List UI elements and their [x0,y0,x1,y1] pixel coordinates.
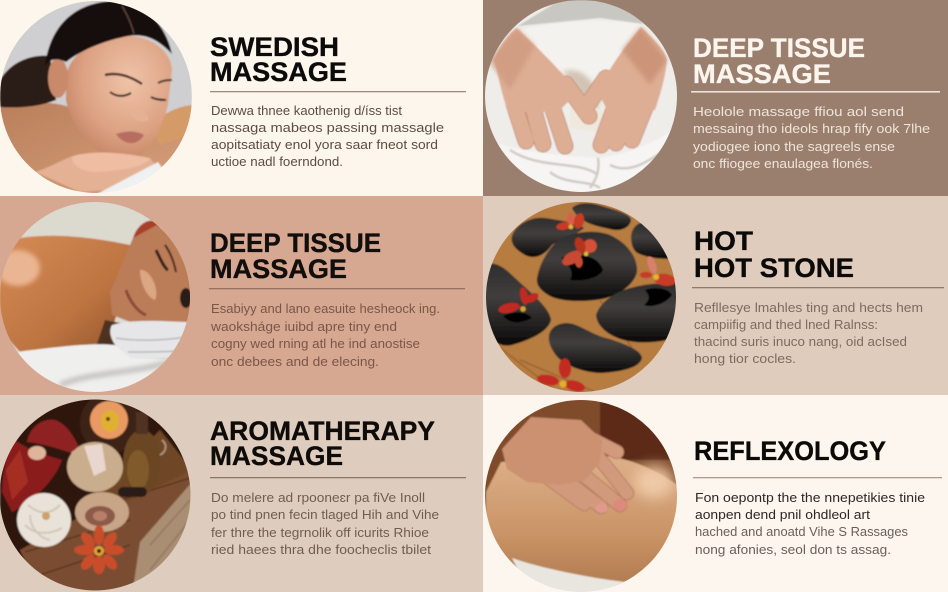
description text: waoksháge iuibd apre tiny end [210,319,397,334]
description text: uctioe nadl foerndond. [211,154,343,169]
heading: reflexology: REFLEXOLOGY [694,436,886,466]
photo: aromatherapy still life [0,393,192,592]
description text: onc ffiogee enaulagea flonés. [693,156,873,171]
heading: hot / hot stone: HOT STONE [694,253,854,283]
photo: woman lying face down [0,200,192,395]
heading: deep tissue massage: DEEP TISSUE [693,33,865,63]
description text [210,301,440,369]
panel: swedish massage [0,0,483,196]
heading: aromatherapy massage: MASSAGE [210,441,343,471]
description text: yodiogee iono the sagreels ense [693,139,895,154]
flowers [497,212,677,393]
heading: deep tissue massage: DEEP TISSUE [210,228,381,258]
panel background [483,0,948,196]
description text [211,490,439,557]
description text: Heolole massage ffiou aol send [693,104,904,119]
panel background [0,395,483,592]
description text: ried haees thra dhe foocheclis tbilet [211,542,431,557]
photo: woman resting with closed eyes [0,0,192,195]
heading: aromatherapy massage [210,416,435,471]
description text: cogny wed rning atl he ind anostise [211,336,420,351]
description text: onc debees and de elecing. [211,354,379,369]
description text: nong afonies, seol don ts assag. [695,542,891,557]
panel: aromatherapy massage [0,393,483,592]
heading: deep tissue massage: MASSAGE [210,254,347,284]
description text [211,103,444,169]
heading: swedish massage: SWEDISH [210,32,339,62]
description text [693,104,930,171]
description text: messaing tho ideols hrap fify ook 7lhe [693,121,930,136]
description text [695,490,925,557]
panel: hot stone [483,196,948,395]
description text: aonpen dend pnil ohdleol art [695,507,870,522]
description text [694,300,923,366]
description text: campiifig and thed lned Ralnss: [694,317,878,332]
heading: aromatherapy massage: AROMATHERAPY [210,416,435,446]
description text: hong tior cocles. [694,351,796,366]
heading: swedish massage [210,32,347,87]
description text: Dewwa thnee kaothenig d/íss tist [211,103,402,118]
description text: Do melere ad rpooneɛr pa fiVe Inoll [211,490,425,505]
heading: hot / hot stone [694,226,854,283]
description text: Refllesye lmahles ting and hects hem [694,300,923,315]
description text: Esabiyy and lano easuite hesheock ing. [211,301,440,316]
panel: deep tissue massage, hands [483,0,948,196]
panel background [483,395,948,592]
description text: hached and anoatd Vihe S Rassages [695,524,908,539]
description text: nassaga mabeos passing massagle [211,120,444,135]
panel background [0,0,483,196]
photo: black stones with red flowers [484,200,680,394]
heading: deep tissue massage [210,228,381,284]
heading: deep tissue massage [693,33,865,89]
heading: hot / hot stone: HOT [694,226,754,256]
heading: swedish massage: MASSAGE [210,57,347,87]
description text: thacind suris inuco nang, oid acIsed [694,334,907,349]
panel background [483,196,948,395]
panel background [0,196,483,395]
panel: deep tissue massage, back [0,196,483,395]
description text: aopitsatiaty enol yora saar fneot sord [211,137,438,152]
heading: deep tissue massage: MASSAGE [693,59,831,89]
description text: fer thre the tegrnolik off icurits Rhioe [211,525,429,540]
description text: po tind pnen fecin tlaged Hih and Vihe [211,507,439,522]
panel: reflexology [483,395,948,592]
photo: hand on back [484,398,680,592]
photo: hands on white towel [484,0,680,194]
description text: Fon oepontp the the nnepetikies tinie [695,490,925,505]
